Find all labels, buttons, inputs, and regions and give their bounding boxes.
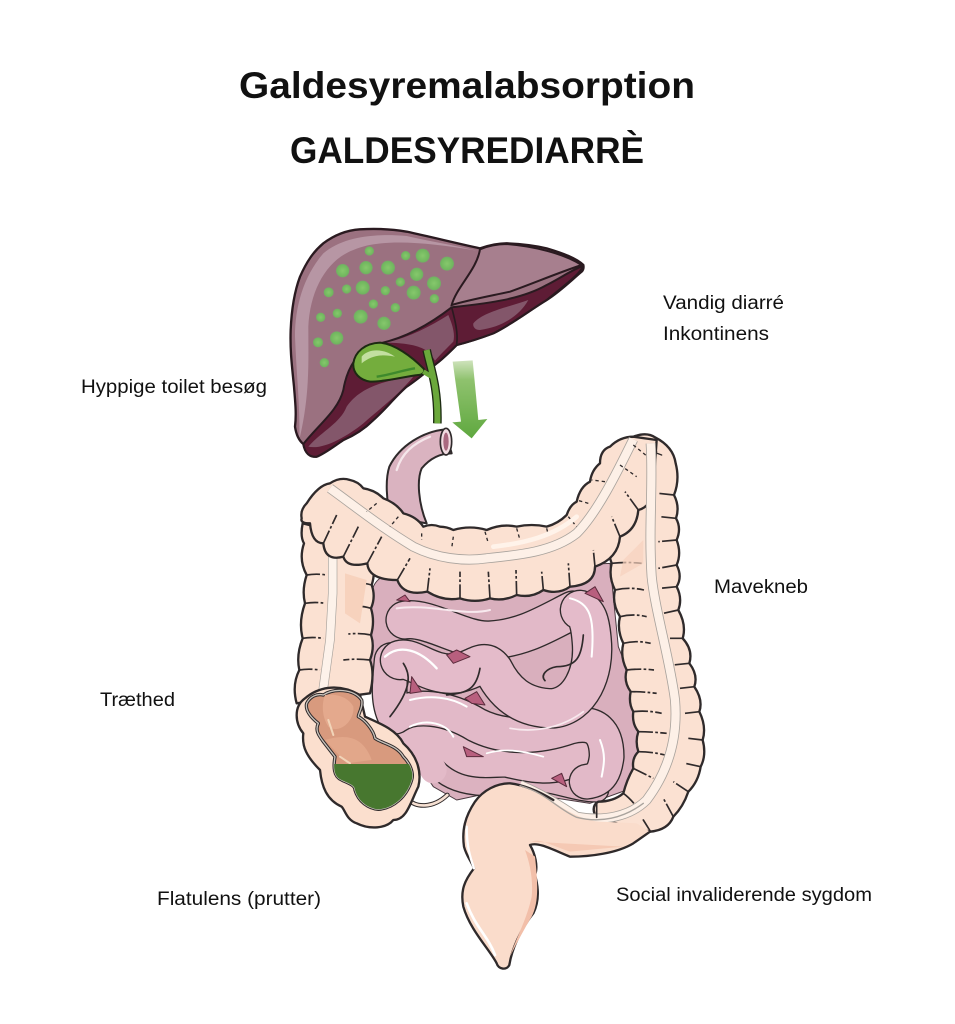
gallbladder — [353, 343, 424, 382]
title: GALDESYREDIARRÈ — [290, 130, 644, 171]
label: fatigue: Træthed — [100, 690, 175, 711]
rectum and sigmoid colon — [462, 783, 650, 969]
mesentery backdrop — [370, 563, 640, 803]
duodenum — [387, 428, 452, 523]
label: flatulence: Flatulens (prutter) — [157, 889, 321, 910]
small intestine loops — [385, 587, 607, 790]
liver — [291, 229, 584, 457]
title: Galdesyremalabsorption — [239, 65, 695, 106]
descending colon — [594, 434, 704, 832]
cecum cut-away with green fluid — [297, 688, 420, 827]
label: stomach cramps: Mavekneb — [714, 577, 808, 598]
liver lobe seam — [452, 307, 457, 344]
transverse colon — [301, 437, 662, 601]
green downward arrow — [452, 360, 487, 438]
liver highlight rim — [295, 235, 477, 437]
right liver lobe — [452, 244, 582, 305]
label: watery diarrhoea and incontinence: Vandig diarré — [663, 293, 784, 314]
label: frequent toilet visits: Hyppige toilet besøg — [81, 377, 267, 398]
liver outer shape — [291, 229, 584, 457]
descending colon band — [520, 443, 676, 819]
title — [239, 65, 695, 171]
label: watery diarrhoea and incontinence: Inkontinens — [663, 324, 769, 345]
ascending colon — [295, 523, 374, 703]
liver lower mauve patches — [308, 300, 528, 447]
appendix — [407, 795, 447, 805]
liver dark underside — [303, 266, 583, 457]
label: watery diarrhoea and incontinence — [663, 293, 784, 345]
bile duct — [423, 350, 437, 423]
small intestine and colon illustration — [295, 428, 704, 969]
label: socially disabling disease: Social invaliderende sygdom — [616, 885, 872, 906]
infographic canvas — [82, 71, 871, 970]
liver fat droplets — [313, 246, 454, 367]
